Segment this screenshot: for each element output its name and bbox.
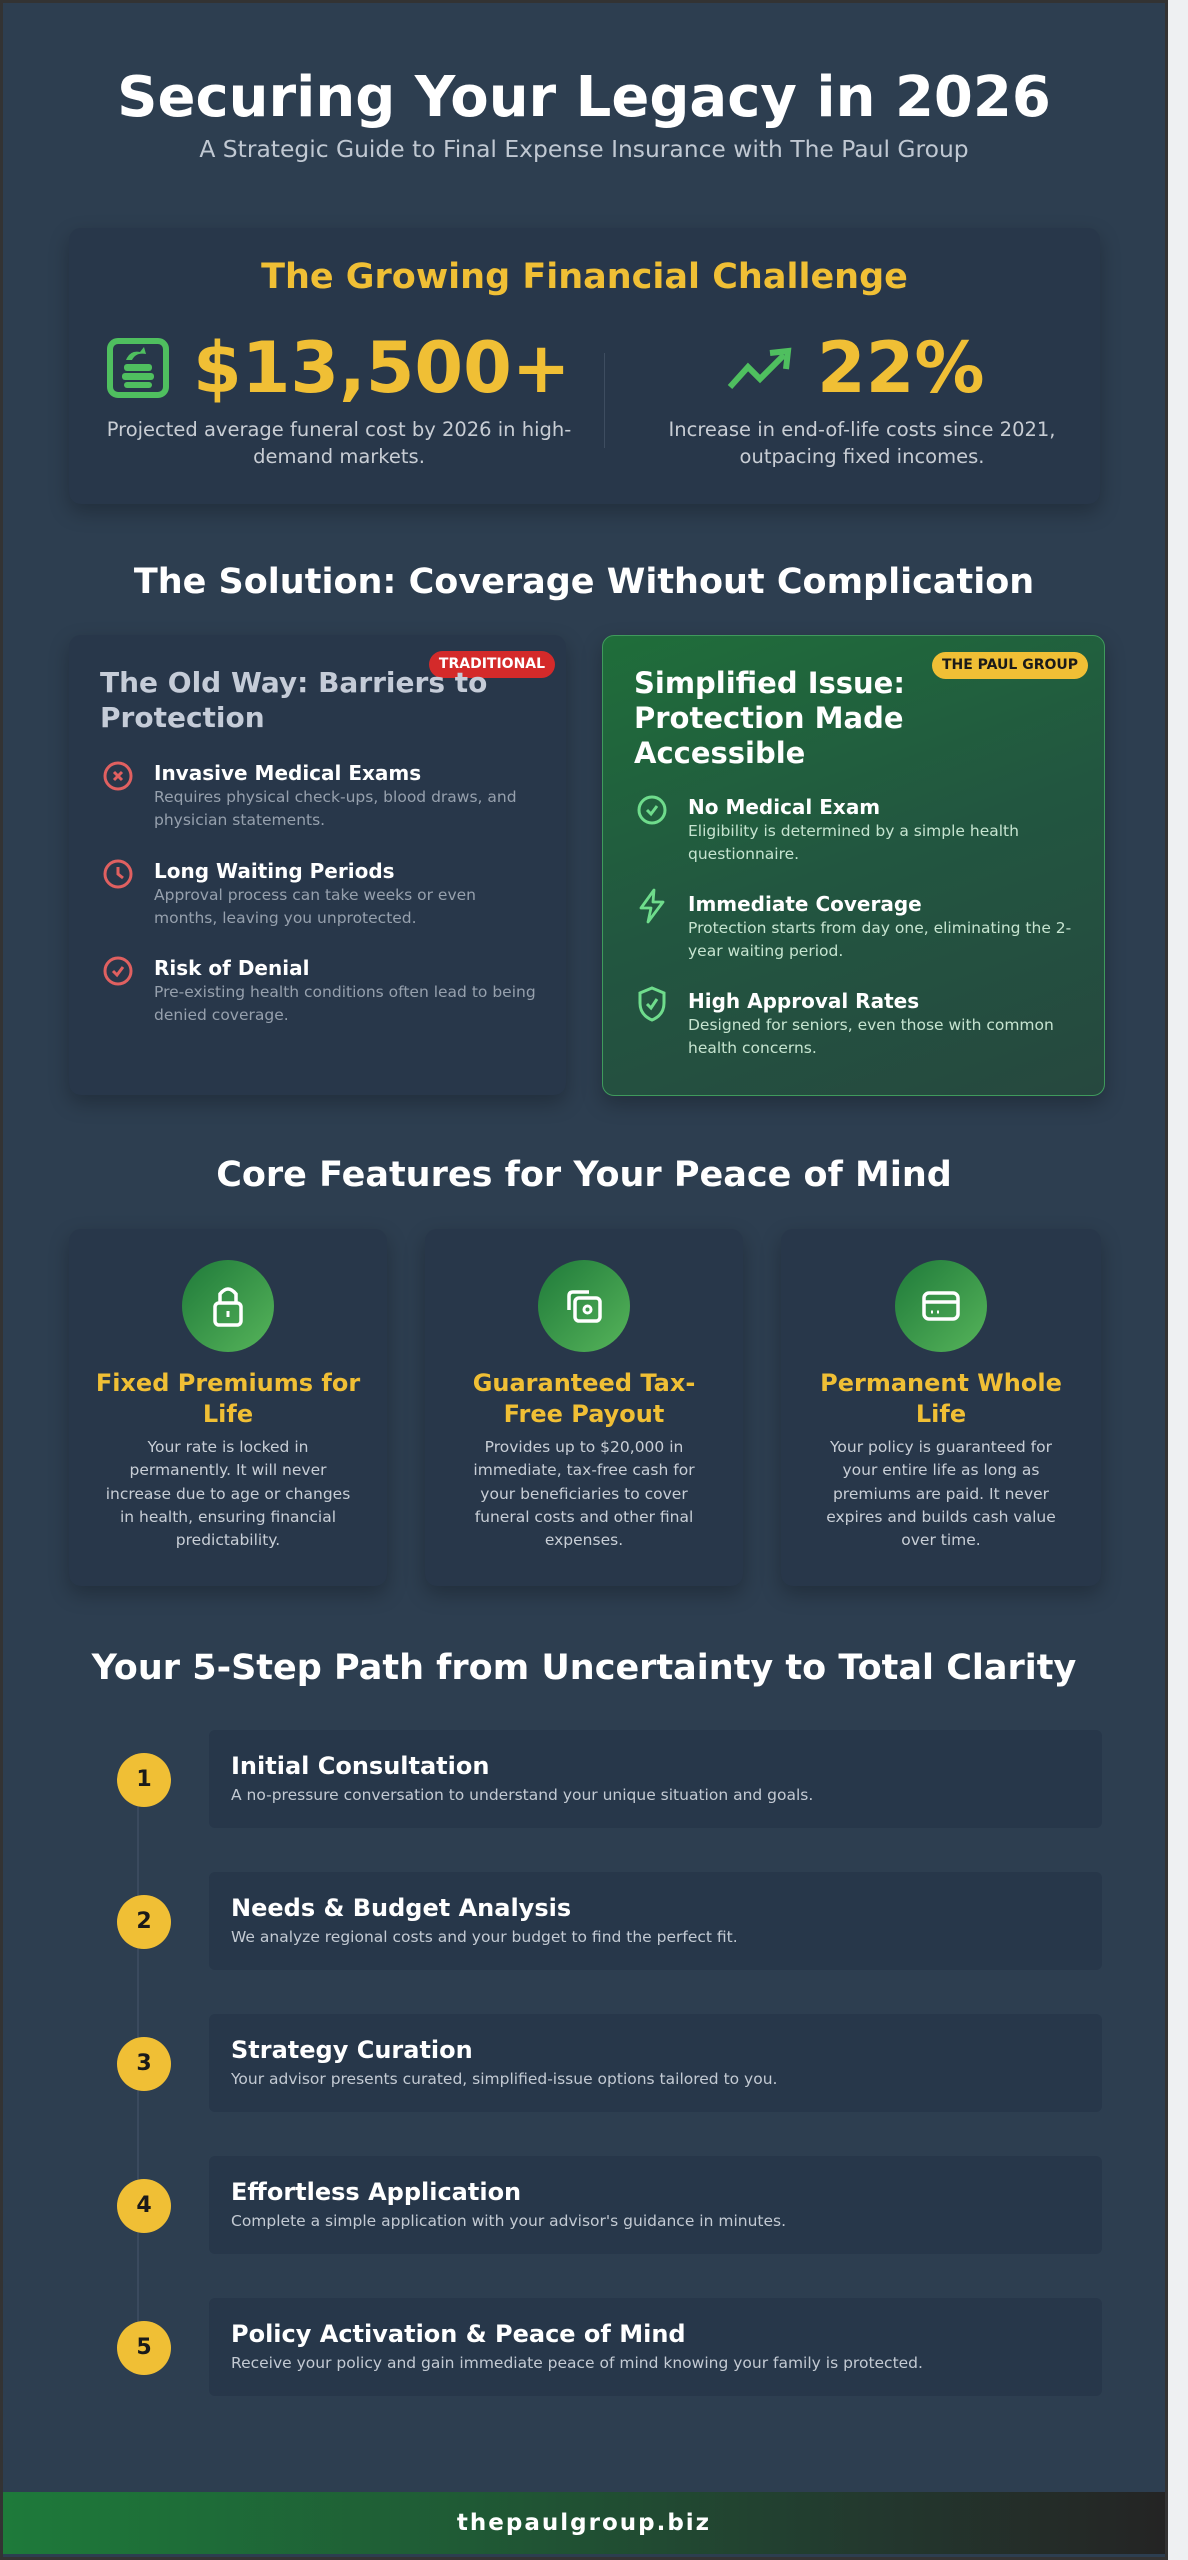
panel: simplified issue — [602, 635, 1105, 1096]
item: denial: Pre-existing health conditions often lead to being denied coverage. — [154, 983, 536, 1024]
icon: check circle red — [104, 956, 132, 986]
step 1: 1 — [136, 1767, 152, 1792]
step 4 — [117, 2178, 786, 2233]
icon: trending up — [728, 348, 792, 389]
item: no exam — [638, 795, 1019, 863]
icon: money bag — [107, 338, 169, 398]
item: exams: Requires physical check-ups, blood draws, and physician statements. — [154, 788, 517, 829]
heading: simplified: Simplified Issue: Protection Made Accessible — [634, 666, 905, 770]
title: Securing Your Legacy in 2026 — [117, 65, 1051, 130]
badge: traditional: TRADITIONAL — [439, 656, 545, 672]
step 2: 2 — [136, 1909, 152, 1934]
step 5: Receive your policy and gain immediate peace of mind knowing your family is protected. — [231, 2354, 923, 2372]
item: no exam: Eligibility is determined by a simple health questionnaire. — [688, 822, 1019, 863]
heading: old way: The Old Way: Barriers to Protection — [100, 666, 487, 734]
step 4: Effortless Application — [231, 2178, 521, 2206]
step 5: Policy Activation & Peace of Mind — [231, 2320, 686, 2348]
feature card: whole life: Your policy is guaranteed for your entire life as long as premiums are paid. It never expires and builds cash value over time. — [826, 1438, 1056, 1549]
item: approval: Designed for seniors, even those with common health concerns. — [688, 1016, 1054, 1057]
feature card: tax-free payout: Provides up to $20,000 in immediate, tax-free cash for your beneficiaries to cover funeral costs and other final expenses. — [473, 1438, 695, 1549]
item: waiting: Approval process can take weeks or even months, leaving you unprotected. — [154, 886, 476, 927]
item: approval — [638, 986, 1054, 1057]
icon: lock — [182, 1260, 274, 1352]
icon: shield check — [638, 986, 666, 1022]
item: waiting — [104, 859, 476, 927]
icon: card — [895, 1260, 987, 1352]
stat description: Projected average funeral cost by 2026 in high-demand markets. — [107, 418, 571, 468]
badge: traditional — [429, 651, 555, 678]
heading: challenge: The Growing Financial Challenge — [261, 257, 908, 297]
feature card: tax-free payout — [425, 1229, 743, 1586]
icon: clock — [104, 860, 132, 888]
step 2: Needs & Budget Analysis — [231, 1894, 571, 1922]
icon: money — [538, 1260, 630, 1352]
item: no exam: No Medical Exam — [688, 795, 880, 819]
heading: solution: The Solution: Coverage Without Complication — [134, 562, 1034, 602]
stat number: $13,500+ — [193, 327, 570, 409]
step 5 — [117, 2320, 923, 2375]
step 4: 4 — [136, 2193, 152, 2218]
feature card: fixed premiums: Fixed Premiums for Life — [96, 1369, 360, 1428]
stat: cost increase — [668, 327, 1055, 468]
step 1: A no-pressure conversation to understand your unique situation and goals. — [231, 1786, 813, 1804]
stat: funeral cost — [107, 327, 571, 468]
badge: the paul group — [932, 652, 1088, 679]
step 5: 5 — [136, 2335, 152, 2360]
feature card: whole life — [781, 1229, 1101, 1586]
footer: thepaulgroup.biz — [457, 2510, 711, 2536]
feature card: whole life: Permanent Whole Life — [820, 1369, 1062, 1428]
heading: core features: Core Features for Your Peace of Mind — [216, 1155, 952, 1195]
feature card: fixed premiums: Your rate is locked in permanently. It will never increase due to age or changes in health, ensuring financial predictability. — [106, 1438, 350, 1549]
step 2 — [117, 1894, 738, 1949]
heading: 5-step path: Your 5-Step Path from Uncertainty to Total Clarity — [92, 1648, 1076, 1688]
step 1 — [117, 1752, 813, 1807]
item: approval: High Approval Rates — [688, 989, 919, 1013]
icon: check circle — [638, 796, 666, 824]
item: immediate: Protection starts from day one, eliminating the 2-year waiting period. — [688, 919, 1071, 960]
item: exams — [104, 761, 517, 829]
step 3 — [117, 2036, 777, 2091]
stat number: 22% — [817, 327, 985, 409]
footer — [3, 2492, 1165, 2554]
step 4: Complete a simple application with your advisor's guidance in minutes. — [231, 2212, 786, 2230]
step 3: Strategy Curation — [231, 2036, 473, 2064]
panel: financial challenge — [69, 228, 1100, 504]
panel: old way — [69, 635, 566, 1095]
feature card: tax-free payout: Guaranteed Tax-Free Payout — [473, 1369, 695, 1428]
item: denial: Risk of Denial — [154, 956, 309, 980]
icon: bolt — [640, 888, 664, 924]
badge: the paul group: THE PAUL GROUP — [942, 657, 1078, 673]
item: immediate — [640, 888, 1071, 960]
icon: x circle — [104, 762, 132, 790]
stat description: Increase in end-of-life costs since 2021, outpacing fixed incomes. — [668, 418, 1055, 468]
item: waiting: Long Waiting Periods — [154, 859, 395, 883]
item: exams: Invasive Medical Exams — [154, 761, 421, 785]
item: denial — [104, 956, 536, 1024]
step 2: We analyze regional costs and your budget to find the perfect fit. — [231, 1928, 738, 1946]
step 3: Your advisor presents curated, simplified-issue options tailored to you. — [231, 2070, 777, 2088]
step 1: Initial Consultation — [231, 1752, 489, 1780]
item: immediate: Immediate Coverage — [688, 892, 922, 916]
feature card: fixed premiums — [69, 1229, 387, 1586]
subtitle: A Strategic Guide to Final Expense Insurance with The Paul Group — [199, 135, 969, 163]
step 3: 3 — [136, 2051, 152, 2076]
